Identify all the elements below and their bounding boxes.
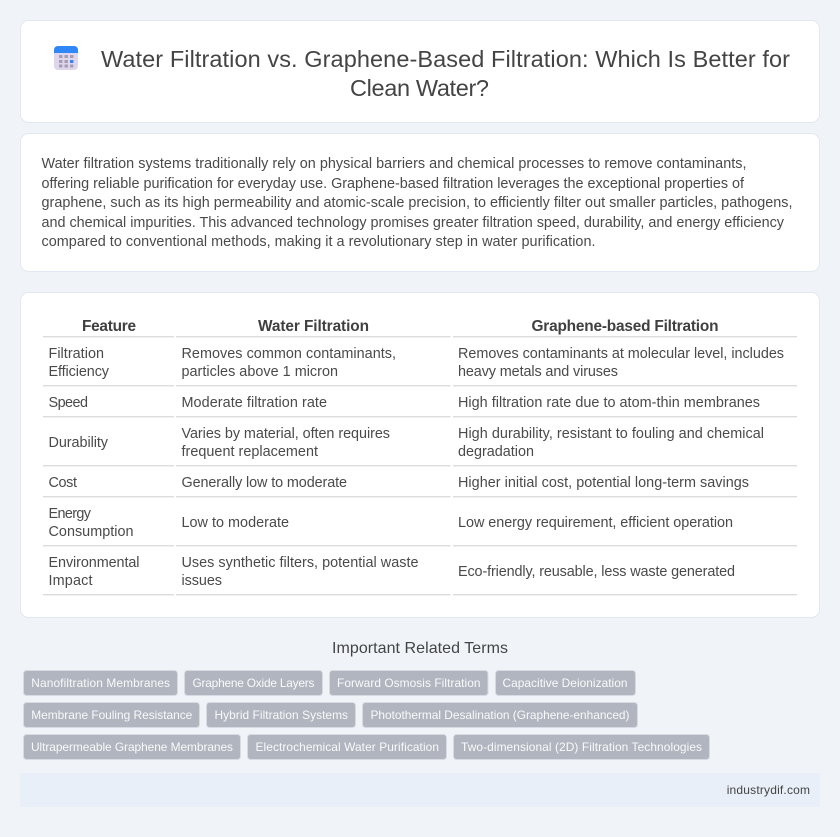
text block: introduction: and chemical impurities. This advanced technology promises greater filtration speed, durability, and energy efficiency (42, 215, 785, 231)
row: cost: Cost (48, 475, 77, 491)
text block: introduction: compared to conventional methods, making it a revolutionary step in water purification. (42, 234, 596, 250)
row: environmental impact: Uses synthetic filters, potential waste (182, 555, 418, 571)
row: cost: Higher initial cost, potential long-term savings (458, 475, 749, 491)
row: speed: High filtration rate due to atom-thin membranes (458, 395, 760, 411)
text block: introduction: offering reliable purification for everyday use. Graphene-based filtration leverages the exceptional properties of (42, 176, 745, 192)
row: energy consumption: Low to moderate (182, 515, 289, 531)
row: durability: High durability, resistant to fouling and chemical (458, 426, 764, 442)
row: environmental impact (48, 555, 735, 589)
tag list: related terms: Photothermal Desalination (Graphene-enhanced) (370, 708, 630, 722)
text block: introduction: Water filtration systems traditionally rely on physical barriers and chemical processes to remove contaminants, (42, 156, 746, 172)
title: Water Filtration vs. Graphene-Based Filtration: Which Is Better for (101, 46, 790, 72)
row: speed: Moderate filtration rate (182, 395, 327, 411)
title (101, 46, 790, 101)
row: speed: Speed (48, 395, 88, 411)
row: speed (48, 395, 760, 411)
row: durability (48, 426, 764, 460)
tag list: related terms (24, 670, 710, 760)
heading: important related terms: Important Related Terms (332, 640, 508, 657)
row: filtration efficiency: Removes contaminants at molecular level, includes (458, 346, 784, 362)
panel: introduction (20, 134, 820, 272)
row: durability: Durability (48, 435, 109, 451)
row: filtration efficiency: Removes common contaminants, (182, 346, 396, 362)
tag list: related terms: Hybrid Filtration Systems (214, 708, 348, 722)
row: energy consumption: Energy (48, 506, 92, 522)
tag list: related terms: Membrane Fouling Resistance (31, 708, 193, 722)
row: environmental impact: Impact (48, 573, 92, 589)
row: durability: degradation (458, 444, 534, 460)
row: energy consumption: Low energy requirement, efficient operation (458, 515, 733, 531)
tag list: related terms: Electrochemical Water Purification (256, 740, 439, 754)
row: cost: Generally low to moderate (182, 475, 347, 491)
tag list: related terms: Forward Osmosis Filtration (337, 676, 480, 690)
row: filtration efficiency (48, 346, 784, 380)
row: filtration efficiency: heavy metals and viruses (458, 364, 618, 380)
row: filtration efficiency: Filtration (48, 346, 104, 362)
row: filtration efficiency: particles above 1 micron (182, 364, 338, 380)
table header row: Water Filtration (258, 318, 369, 335)
table header row: Graphene-based Filtration (532, 318, 718, 335)
row: energy consumption (48, 506, 733, 540)
row: filtration efficiency: Efficiency (48, 364, 110, 380)
row: environmental impact: Environmental (48, 555, 140, 571)
icon: calendar (54, 46, 78, 70)
footer bar (20, 773, 820, 807)
panel: comparison table (20, 292, 820, 618)
row: cost (48, 475, 749, 491)
tag list: related terms: Two-dimensional (2D) Filtration Technologies (461, 740, 702, 754)
tag list: related terms: Ultrapermeable Graphene Membranes (31, 740, 233, 754)
text block: introduction: graphene, such as its high permeability and atomic-scale precision, to efficiently filter out smaller particles, pathogens, (42, 195, 792, 211)
row: durability: frequent replacement (182, 444, 318, 460)
row: environmental impact: Eco-friendly, reusable, less waste generated (458, 564, 735, 580)
row: environmental impact: issues (182, 573, 222, 589)
panel: header (20, 20, 820, 122)
tag list: related terms: Nanofiltration Membranes (31, 676, 170, 690)
table header row: Feature (82, 318, 136, 335)
row: energy consumption: Consumption (48, 524, 134, 540)
title: Clean Water? (350, 75, 489, 101)
row: durability: Varies by material, often requires (182, 426, 390, 442)
footer bar: industrydif.com (727, 783, 810, 797)
tag list: related terms: Graphene Oxide Layers (192, 676, 315, 690)
table header row (82, 318, 718, 335)
tag list: related terms: Capacitive Deionization (502, 676, 628, 690)
text block: introduction (42, 156, 792, 250)
